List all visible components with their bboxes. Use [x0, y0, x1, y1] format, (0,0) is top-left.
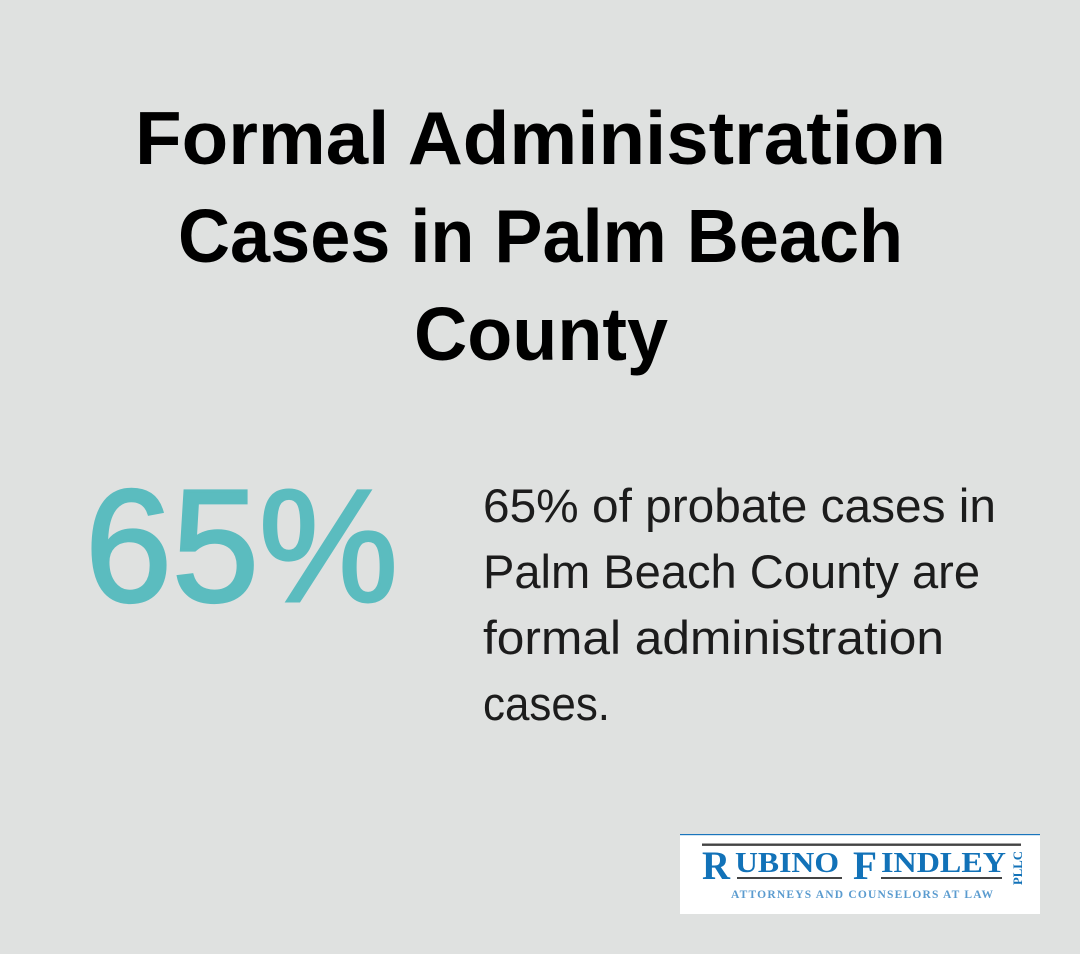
- title: [135, 96, 946, 376]
- description text: cases.: [483, 677, 610, 730]
- description text: [483, 479, 996, 730]
- title: Cases in Palm Beach: [178, 194, 903, 278]
- description text: Palm Beach County are: [483, 545, 980, 598]
- title: County: [414, 292, 668, 376]
- title: Formal Administration: [135, 96, 946, 180]
- big statistic: 65%: 65%: [85, 456, 398, 635]
- logo: Rubino Findley PLLC: PLLC: [1010, 851, 1025, 885]
- logo: Rubino Findley PLLC: ATTORNEYS AND COUNSELORS AT LAW: [731, 889, 994, 901]
- description text: formal administration: [483, 611, 944, 664]
- logo: Rubino Findley PLLC: R: [702, 843, 731, 888]
- logo: Rubino Findley PLLC: [680, 834, 1040, 914]
- logo: Rubino Findley PLLC: UBINO: [735, 847, 839, 879]
- logo: Rubino Findley PLLC: INDLEY: [881, 847, 1006, 879]
- description text: 65% of probate cases in: [483, 479, 996, 532]
- logo: Rubino Findley PLLC: F: [853, 843, 877, 888]
